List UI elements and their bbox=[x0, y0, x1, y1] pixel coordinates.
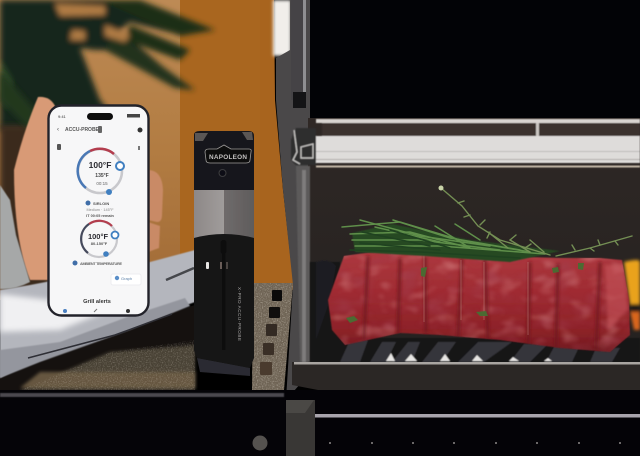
bottom temperature dial: 80-150°F bbox=[91, 241, 108, 246]
meat roast bbox=[325, 250, 635, 355]
hand and sleeve bbox=[0, 97, 163, 289]
towel bbox=[0, 250, 195, 378]
table side panel with vent holes bbox=[252, 283, 294, 390]
new graph button: Graph bbox=[121, 276, 132, 281]
bottom temperature dial: 100°F bbox=[88, 232, 108, 241]
ambient temperature label: AMBIENT TEMPERATURE bbox=[80, 262, 122, 266]
bottom temperature dial bbox=[81, 221, 118, 257]
grill base bbox=[285, 362, 640, 456]
cooking grates bbox=[310, 261, 640, 363]
table top bbox=[0, 305, 195, 392]
device logo bbox=[205, 145, 251, 163]
device vertical text: X-PRO ACCU-PROBE bbox=[237, 287, 242, 341]
phone status bar: 9:41 bbox=[58, 114, 67, 119]
probe details text: SIRLOIN bbox=[93, 201, 109, 206]
vegetables bbox=[624, 260, 640, 330]
white strip behind grill bbox=[273, 0, 291, 56]
device logo: NAPOLEON bbox=[209, 154, 247, 161]
top temperature dial: 135°F bbox=[95, 173, 109, 179]
wood wall background bbox=[0, 0, 294, 300]
device button bbox=[219, 170, 226, 176]
grill alerts label: Grill alerts bbox=[83, 299, 111, 305]
plant foliage bbox=[0, 0, 215, 295]
phone header: ‹ bbox=[57, 127, 59, 133]
warming rack bbox=[291, 119, 640, 168]
probe details text bbox=[86, 200, 114, 218]
thermometer device bbox=[194, 131, 254, 376]
grill lid and side body bbox=[276, 0, 640, 400]
probe details text: Medium · 145°F bbox=[86, 208, 114, 212]
new graph button bbox=[111, 274, 141, 285]
probe details text: IT 00:05 remain bbox=[86, 214, 114, 218]
top temperature dial: 100°F bbox=[89, 160, 111, 170]
top temperature dial: 00:15 bbox=[96, 181, 108, 186]
table front bbox=[0, 390, 285, 456]
grill interior bbox=[296, 118, 640, 364]
top temperature dial bbox=[78, 149, 124, 195]
ambient temperature label bbox=[72, 260, 122, 266]
phone header: ACCU-PROBE bbox=[65, 127, 100, 133]
rosemary herbs bbox=[342, 186, 632, 262]
probe bbox=[206, 240, 228, 350]
phone bbox=[48, 106, 148, 316]
phone tab bar bbox=[63, 309, 130, 313]
phone header bbox=[57, 126, 142, 150]
phone status bar bbox=[58, 113, 140, 120]
